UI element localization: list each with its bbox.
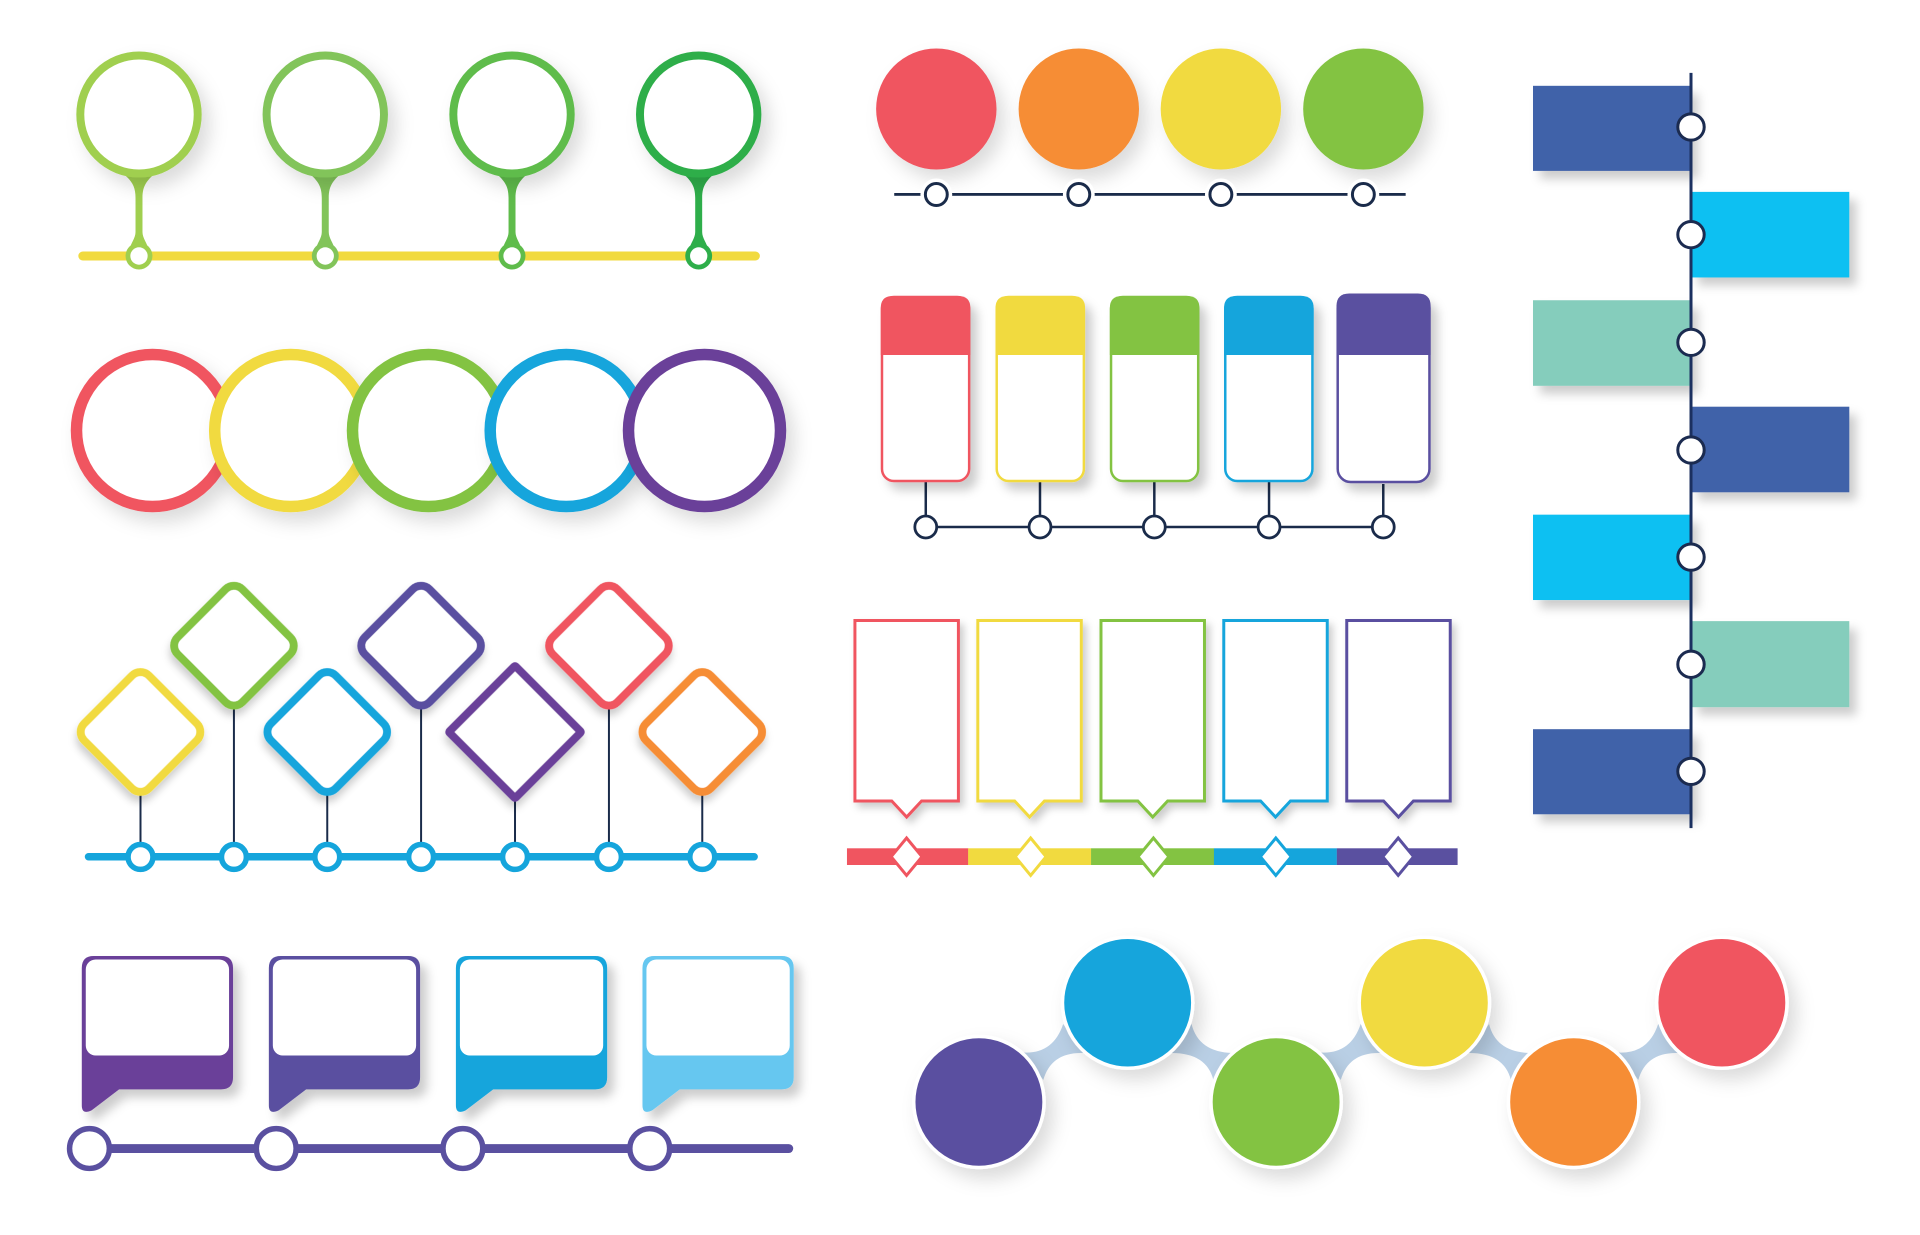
ring yellow (215, 354, 367, 506)
diamond purple (449, 666, 581, 798)
panel: header cards timeline (881, 294, 1431, 538)
bar 4 (1691, 407, 1849, 492)
colour bar (847, 848, 1458, 865)
diamond violet (356, 581, 486, 711)
card violet (1337, 294, 1431, 482)
diamond red (544, 581, 674, 711)
callout violet (1347, 620, 1450, 817)
callout blue (1224, 620, 1327, 817)
node green (1211, 1036, 1341, 1168)
ring blue (490, 354, 642, 506)
bubble violet (269, 956, 420, 1112)
spine (1690, 73, 1692, 828)
pin 2 (267, 56, 384, 270)
bar 2 (1691, 192, 1849, 277)
diamond yellow (76, 667, 205, 797)
ring red (76, 354, 228, 506)
panel: callout boxes with colour bar (847, 620, 1458, 875)
panel: green pin timeline (78, 56, 760, 270)
callout yellow (978, 620, 1081, 817)
bubble light blue (642, 956, 794, 1112)
node orange (1508, 1036, 1639, 1168)
circles timeline nodes (924, 182, 1375, 206)
card blue (1224, 296, 1314, 481)
callout green (1101, 620, 1204, 817)
panel: speech bubbles timeline (70, 956, 794, 1168)
node red (1657, 937, 1787, 1068)
diamond timeline nodes (128, 845, 715, 869)
bubble timeline nodes (70, 1129, 670, 1168)
card yellow (996, 296, 1085, 481)
bar 5 (1533, 515, 1691, 600)
circle red (876, 48, 997, 170)
node violet (914, 1036, 1044, 1168)
pin 4 (640, 56, 757, 270)
bar 7 (1533, 729, 1691, 814)
card red (881, 296, 970, 481)
node yellow (1359, 937, 1490, 1068)
circle green (1303, 48, 1424, 170)
panel: overlapping rings (76, 354, 780, 506)
bubble blue (456, 956, 607, 1112)
circle orange (1019, 48, 1139, 170)
diamond blue (263, 667, 392, 797)
cards timeline nodes (915, 516, 1394, 538)
spine nodes (1678, 114, 1704, 785)
card green (1110, 296, 1199, 481)
callout red (855, 620, 958, 817)
diamond green (169, 581, 299, 711)
pin 3 (453, 56, 571, 270)
panel: solid circles timeline (876, 48, 1424, 206)
colour bar diamonds (891, 838, 1414, 875)
panel: zigzag circles (914, 937, 1787, 1168)
bar 1 (1533, 86, 1691, 171)
diamond orange (638, 667, 767, 797)
node blue (1062, 937, 1193, 1068)
circle yellow (1161, 48, 1281, 170)
circles timeline line (894, 193, 1406, 196)
connectors (1023, 1024, 1678, 1080)
panel: vertical alternating timeline (1533, 73, 1849, 828)
bubble purple (82, 956, 233, 1112)
panel: diamond timeline (76, 581, 767, 869)
ring purple (628, 354, 780, 506)
ring green (352, 354, 504, 506)
bar 3 (1533, 300, 1691, 386)
pin 1 (80, 56, 198, 270)
bar 6 (1691, 621, 1849, 707)
bubble timeline line (89, 1144, 793, 1153)
